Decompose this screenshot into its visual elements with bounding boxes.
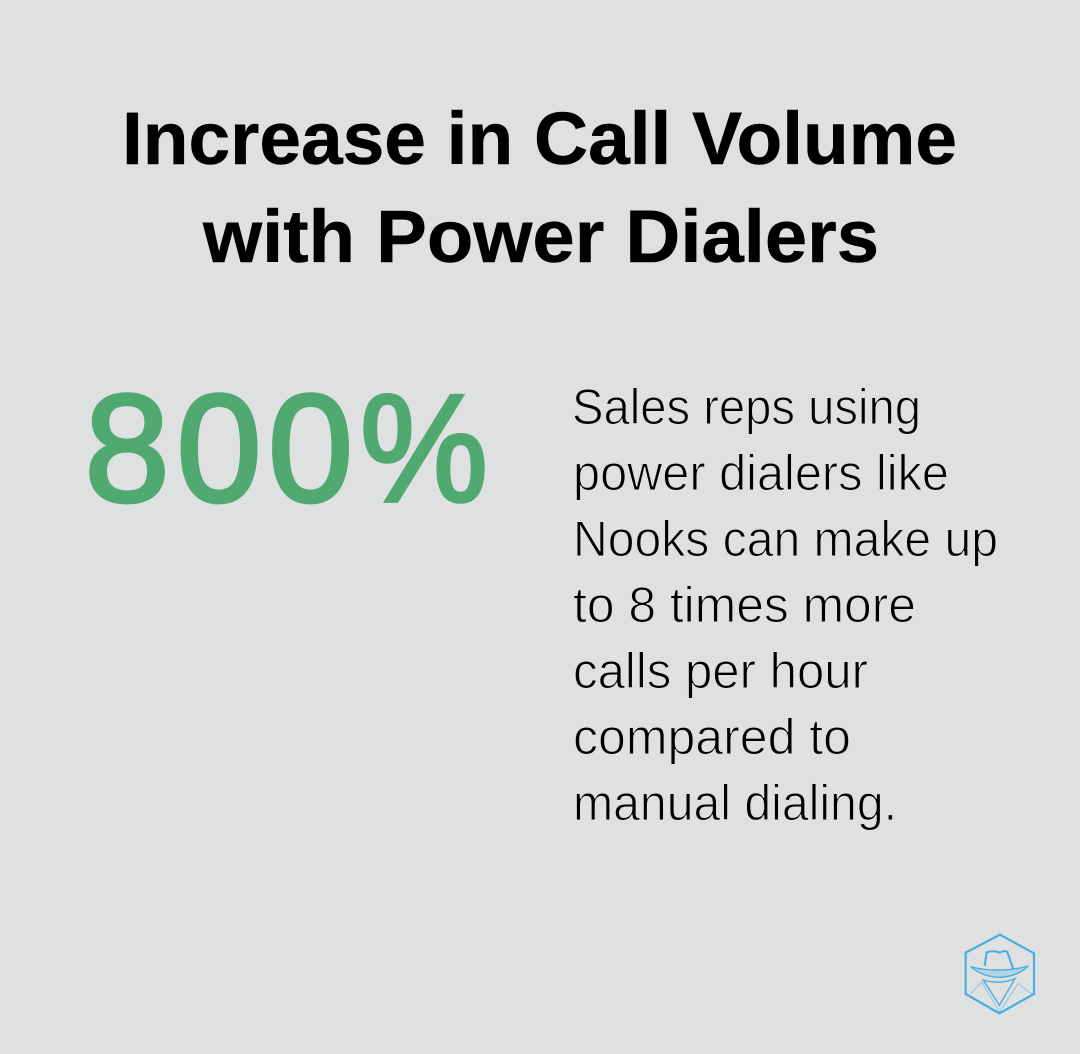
description text: manual dialing. [573, 775, 897, 831]
description text: compared to [573, 709, 851, 765]
description text: to 8 times more [573, 577, 916, 633]
big statistic: 800%: 800 [84, 363, 353, 534]
title: with Power Dialers [202, 195, 879, 278]
description text [572, 379, 998, 831]
big statistic: 800%: % [360, 363, 488, 534]
description text: Sales reps using [572, 379, 921, 435]
icon: hexagon spy logo [966, 935, 1034, 1013]
title [122, 97, 957, 278]
title: Increase in Call Volume [122, 97, 957, 180]
description text: power dialers like [573, 445, 949, 501]
description text: Nooks can make up [573, 511, 998, 567]
description text: calls per hour [573, 643, 868, 699]
